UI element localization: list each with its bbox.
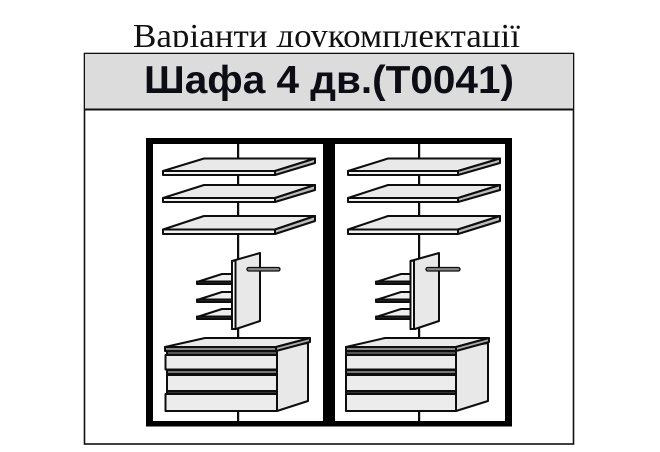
vertical divider panel [410, 253, 439, 329]
shelf 3 [348, 216, 500, 234]
hanger rail [426, 268, 460, 271]
shelf 2 [348, 185, 500, 202]
panel: table frame [84, 54, 574, 444]
hanging pole [418, 144, 420, 421]
shelf 2 [163, 185, 315, 202]
heading: wardrobe name: Шафа 4 дв.(T0041) [144, 59, 514, 102]
vertical divider panel [232, 253, 260, 329]
panel: header band [84, 54, 574, 110]
shelf 3 [163, 216, 315, 234]
drawer unit [165, 338, 310, 411]
left compartment [163, 144, 315, 421]
white mask clipping title descenders [84, 47, 574, 53]
hanging pole [237, 144, 239, 421]
title: Варіанти доукомплектації [133, 18, 521, 55]
shelf 1 [348, 158, 500, 175]
small side shelves [376, 274, 411, 319]
drawer unit [346, 338, 489, 411]
small side shelves [197, 274, 232, 319]
right compartment [346, 144, 500, 421]
shelf 1 [163, 158, 315, 175]
wardrobe outer frame [146, 138, 512, 426]
hanger rail [247, 268, 280, 271]
